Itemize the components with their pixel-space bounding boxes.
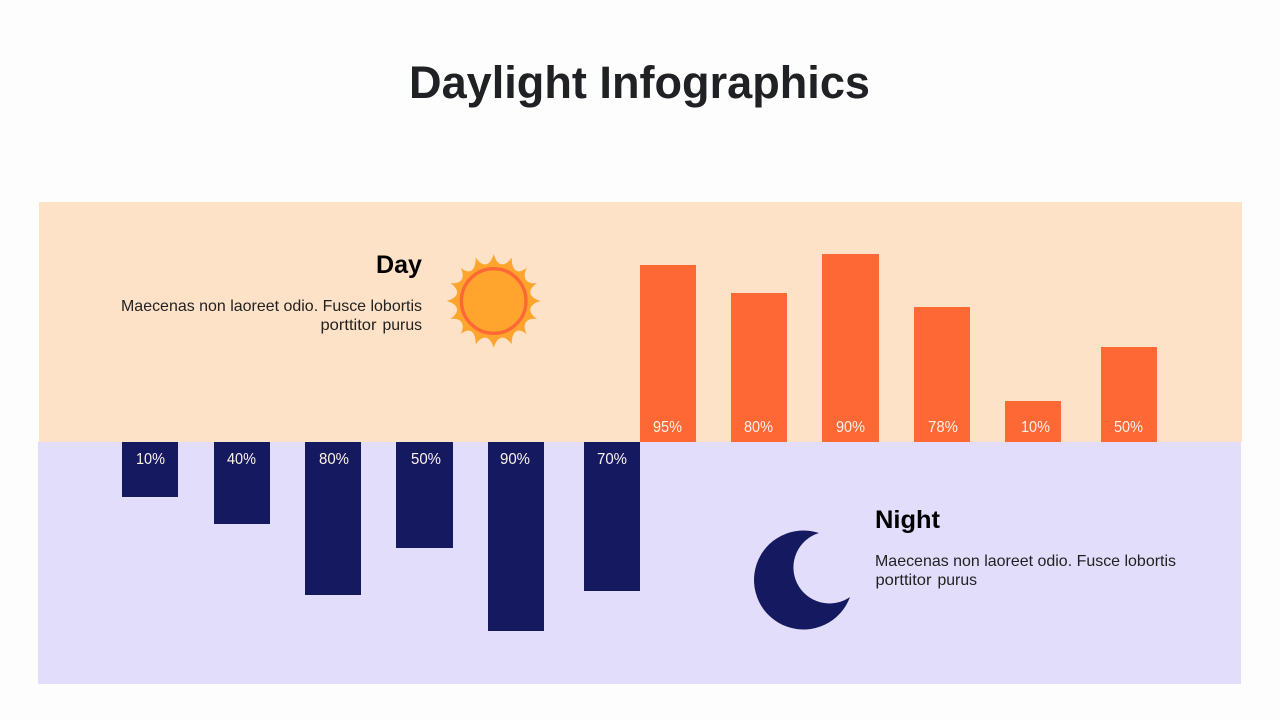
bar: 78% xyxy=(914,307,970,442)
text block: night description xyxy=(875,553,1176,589)
heading: night: Night xyxy=(875,506,941,534)
bar: 10%: 10% xyxy=(1021,419,1050,436)
text block: day description: purus xyxy=(382,317,422,334)
text block: night description: purus xyxy=(938,572,977,589)
bar: 90%: 90% xyxy=(500,451,530,468)
bar: 80% xyxy=(731,293,787,442)
bar: 50% xyxy=(1101,347,1157,442)
bar chart: night xyxy=(122,442,640,631)
text block: day description xyxy=(121,298,422,334)
bar: 10% xyxy=(122,442,178,497)
panel: day xyxy=(39,202,1242,442)
text block: night description: Maecenas non laoreet odio. Fusce lobortis xyxy=(875,553,1176,570)
bar: 40% xyxy=(214,442,270,524)
bar: 10%: 10% xyxy=(136,451,165,468)
bar chart: day xyxy=(640,254,1157,442)
bar: 70% xyxy=(584,442,640,591)
text block: day description: Maecenas non laoreet odio. Fusce lobortis xyxy=(121,298,422,315)
bar: 90% xyxy=(822,254,879,442)
icon: moon xyxy=(754,531,850,630)
panel: night xyxy=(38,442,1241,684)
bar: 10% xyxy=(1005,401,1061,442)
bar: 50%: 50% xyxy=(411,451,441,468)
bar: 80% xyxy=(305,442,361,595)
title: Daylight Infographics xyxy=(409,57,870,108)
bar: 90%: 90% xyxy=(836,419,865,436)
bar: 90% xyxy=(488,442,544,631)
heading: day: Day xyxy=(376,251,422,279)
bar: 50% xyxy=(396,442,453,548)
icon: sun xyxy=(447,254,541,348)
text block: day description: porttitor xyxy=(320,317,377,334)
text block: night description: porttitor xyxy=(876,572,932,589)
bar: 78%: 78% xyxy=(928,419,958,436)
bar: 80%: 80% xyxy=(319,451,349,468)
bar: 40%: 40% xyxy=(227,451,256,468)
bar: 95%: 95% xyxy=(653,419,682,436)
bar: 80%: 80% xyxy=(744,419,773,436)
bar: 95% xyxy=(640,265,696,442)
bar: 50%: 50% xyxy=(1114,419,1143,436)
bar: 70%: 70% xyxy=(597,451,627,468)
